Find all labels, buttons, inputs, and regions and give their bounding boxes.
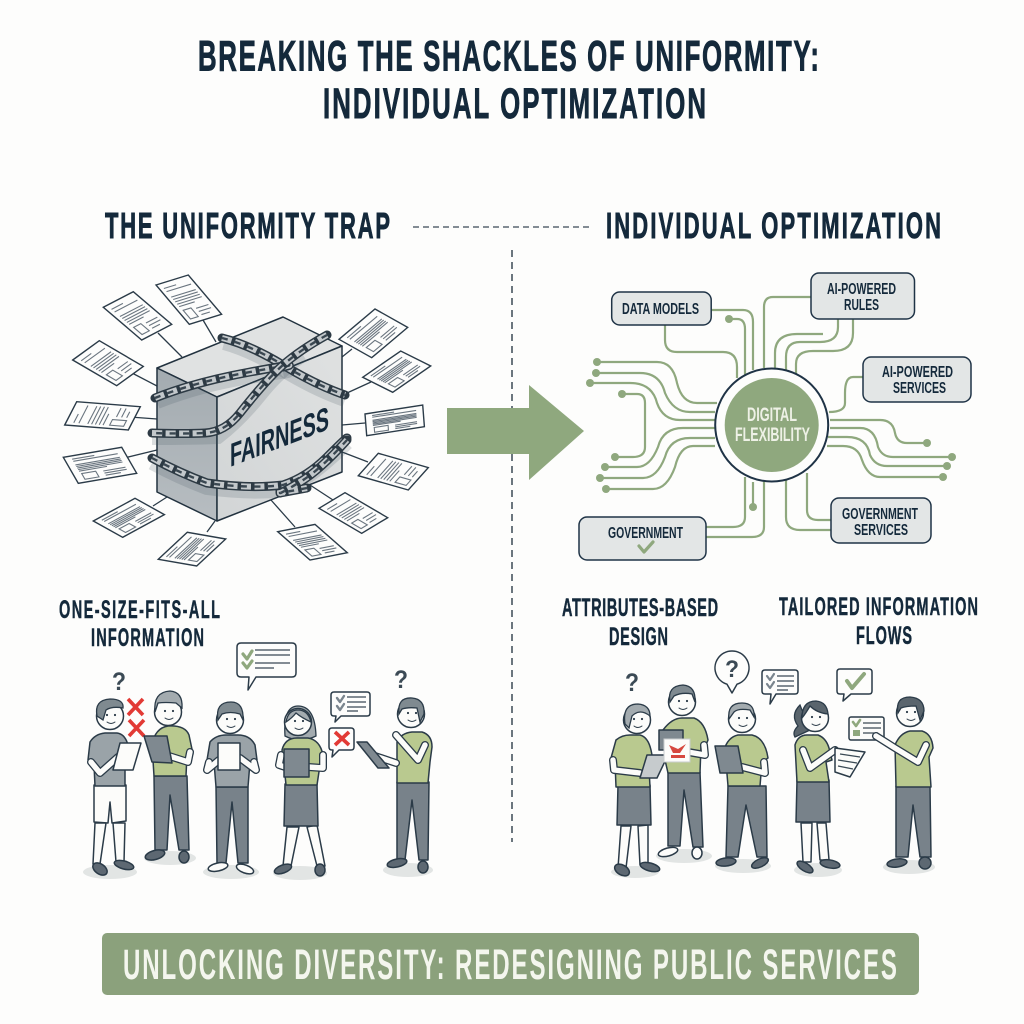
label: attributes-based design — [562, 595, 718, 651]
box: ai-powered services: SERVICES — [893, 380, 946, 397]
label: one-size-fits-all information: ONE-SIZE-FITS-ALL — [59, 597, 220, 624]
label: tailored information flows: FLOWS — [856, 623, 912, 650]
information card — [849, 717, 884, 740]
box: government: GOVERNMENT — [608, 525, 683, 542]
group: people confused by uniform information — [83, 643, 433, 880]
person 1 — [83, 699, 141, 879]
box: data models — [612, 292, 711, 325]
person 4 — [273, 706, 327, 880]
box: government services — [831, 498, 931, 543]
speech bubble: question — [715, 651, 749, 693]
speech bubble: red cross — [329, 728, 354, 757]
box: government services: GOVERNMENT — [842, 506, 918, 523]
box: ai-powered rules — [811, 273, 914, 319]
box: ai-powered rules: AI-POWERED — [827, 281, 896, 298]
label: attributes-based design: ATTRIBUTES-BASED — [562, 595, 718, 622]
question mark: ? — [394, 666, 408, 694]
circuit lines — [590, 297, 952, 537]
arrow — [447, 385, 584, 480]
panel: digital flexibility network — [579, 273, 971, 560]
box: government services: SERVICES — [854, 522, 908, 539]
chains around the block — [152, 335, 347, 493]
box: ai-powered services — [863, 357, 971, 402]
label: attributes-based design: DESIGN — [609, 624, 668, 651]
person 7 — [656, 685, 712, 863]
question mark: ? — [112, 668, 126, 696]
person 3 — [203, 702, 259, 879]
red crosses — [128, 699, 144, 736]
label: fairness: FAIRNESS — [230, 400, 329, 475]
banner: UNLOCKING DIVERSITY: REDESIGNING PUBLIC SERVICES — [123, 941, 897, 989]
question mark: ? — [625, 669, 639, 697]
title: INDIVIDUAL OPTIMIZATION — [323, 79, 706, 128]
hub: digital flexibility — [715, 368, 828, 482]
heading: individual optimization: INDIVIDUAL OPTIMIZATION — [606, 207, 941, 246]
heading: the uniformity trap: THE UNIFORMITY TRAP — [105, 207, 390, 246]
speech bubble: small list — [331, 692, 370, 722]
box: ai-powered rules: RULES — [844, 297, 879, 314]
speech bubble: checklist — [237, 643, 296, 690]
group: people with tailored information — [611, 651, 935, 878]
person 6 — [611, 704, 668, 878]
panel: fairness block with documents — [63, 275, 431, 566]
person 5 — [357, 698, 433, 877]
hub: digital flexibility: FLEXIBILITY — [735, 425, 810, 446]
speech bubble: checklist small — [762, 670, 798, 704]
person 10 — [876, 697, 935, 874]
box: government — [579, 517, 706, 560]
hub: digital flexibility: DIGITAL — [747, 405, 797, 426]
box: ai-powered services: AI-POWERED — [882, 364, 953, 381]
person 9 — [794, 701, 865, 877]
label: one-size-fits-all information — [59, 597, 220, 652]
title — [198, 32, 819, 128]
person 2 — [144, 691, 196, 865]
label: tailored information flows — [779, 594, 978, 650]
red document — [664, 739, 690, 762]
speech bubble: check — [837, 669, 872, 701]
concrete block — [157, 317, 342, 521]
title: BREAKING THE SHACKLES OF UNIFORMITY: — [198, 32, 819, 80]
person 8 — [715, 703, 771, 873]
label: tailored information flows: TAILORED INFORMATION — [779, 594, 978, 621]
box: data models: DATA MODELS — [622, 301, 699, 318]
circuit end dots — [586, 315, 956, 511]
connector lines to documents — [124, 320, 371, 532]
documents scattered around the block — [63, 275, 431, 566]
speech bubble: question: ? — [725, 656, 739, 683]
label: one-size-fits-all information: INFORMATION — [91, 625, 204, 652]
